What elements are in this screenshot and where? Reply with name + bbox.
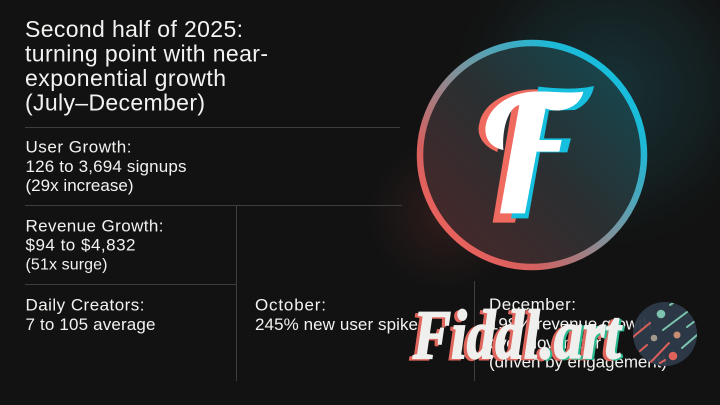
text block: daily creators — [26, 296, 156, 334]
text block: october — [255, 296, 418, 334]
text block: daily creators: Daily Creators: — [26, 296, 144, 314]
text block: october: 245% new user spike — [255, 315, 418, 334]
text block: daily creators: 7 to 105 average — [26, 315, 156, 334]
title: Second half of 2025: — [25, 16, 243, 42]
letter F with offset colour layers — [479, 86, 594, 223]
title: turning point with near- — [25, 40, 268, 66]
text block: december: (driven by engagement) — [489, 352, 667, 372]
wordmark: Fiddl.art: Fiddl.art — [409, 297, 619, 375]
title: (July–December) — [25, 90, 205, 116]
text block: revenue growth: $94 to $4,832 — [26, 236, 136, 254]
text block: december: December: — [489, 295, 576, 314]
text block: december: 198% revenue growth — [489, 314, 652, 334]
badge: dark planet with streaks — [633, 302, 697, 366]
text block: october: October: — [255, 296, 326, 314]
badge dots — [651, 310, 680, 360]
wordmark: Fiddl.art: Fiddl.art — [412, 296, 623, 373]
text block: december: over November — [489, 334, 601, 352]
text block: revenue growth: Revenue Growth: — [26, 216, 164, 236]
text block: user growth — [26, 138, 186, 195]
badge streaks — [633, 303, 697, 365]
background glow — [340, 0, 720, 310]
title: exponential growth — [25, 65, 226, 91]
grid dividers — [25, 128, 474, 381]
title — [25, 16, 268, 116]
text block: revenue growth: (51x surge) — [26, 256, 108, 274]
text block: user growth: (29x increase) — [26, 176, 134, 195]
text block: user growth: 126 to 3,694 signups — [26, 157, 186, 176]
text block: december — [489, 295, 667, 372]
text block: user growth: User Growth: — [26, 138, 132, 156]
logo disc — [420, 43, 644, 267]
text block: revenue growth — [26, 216, 164, 274]
logo: circle F emblem — [420, 43, 644, 267]
